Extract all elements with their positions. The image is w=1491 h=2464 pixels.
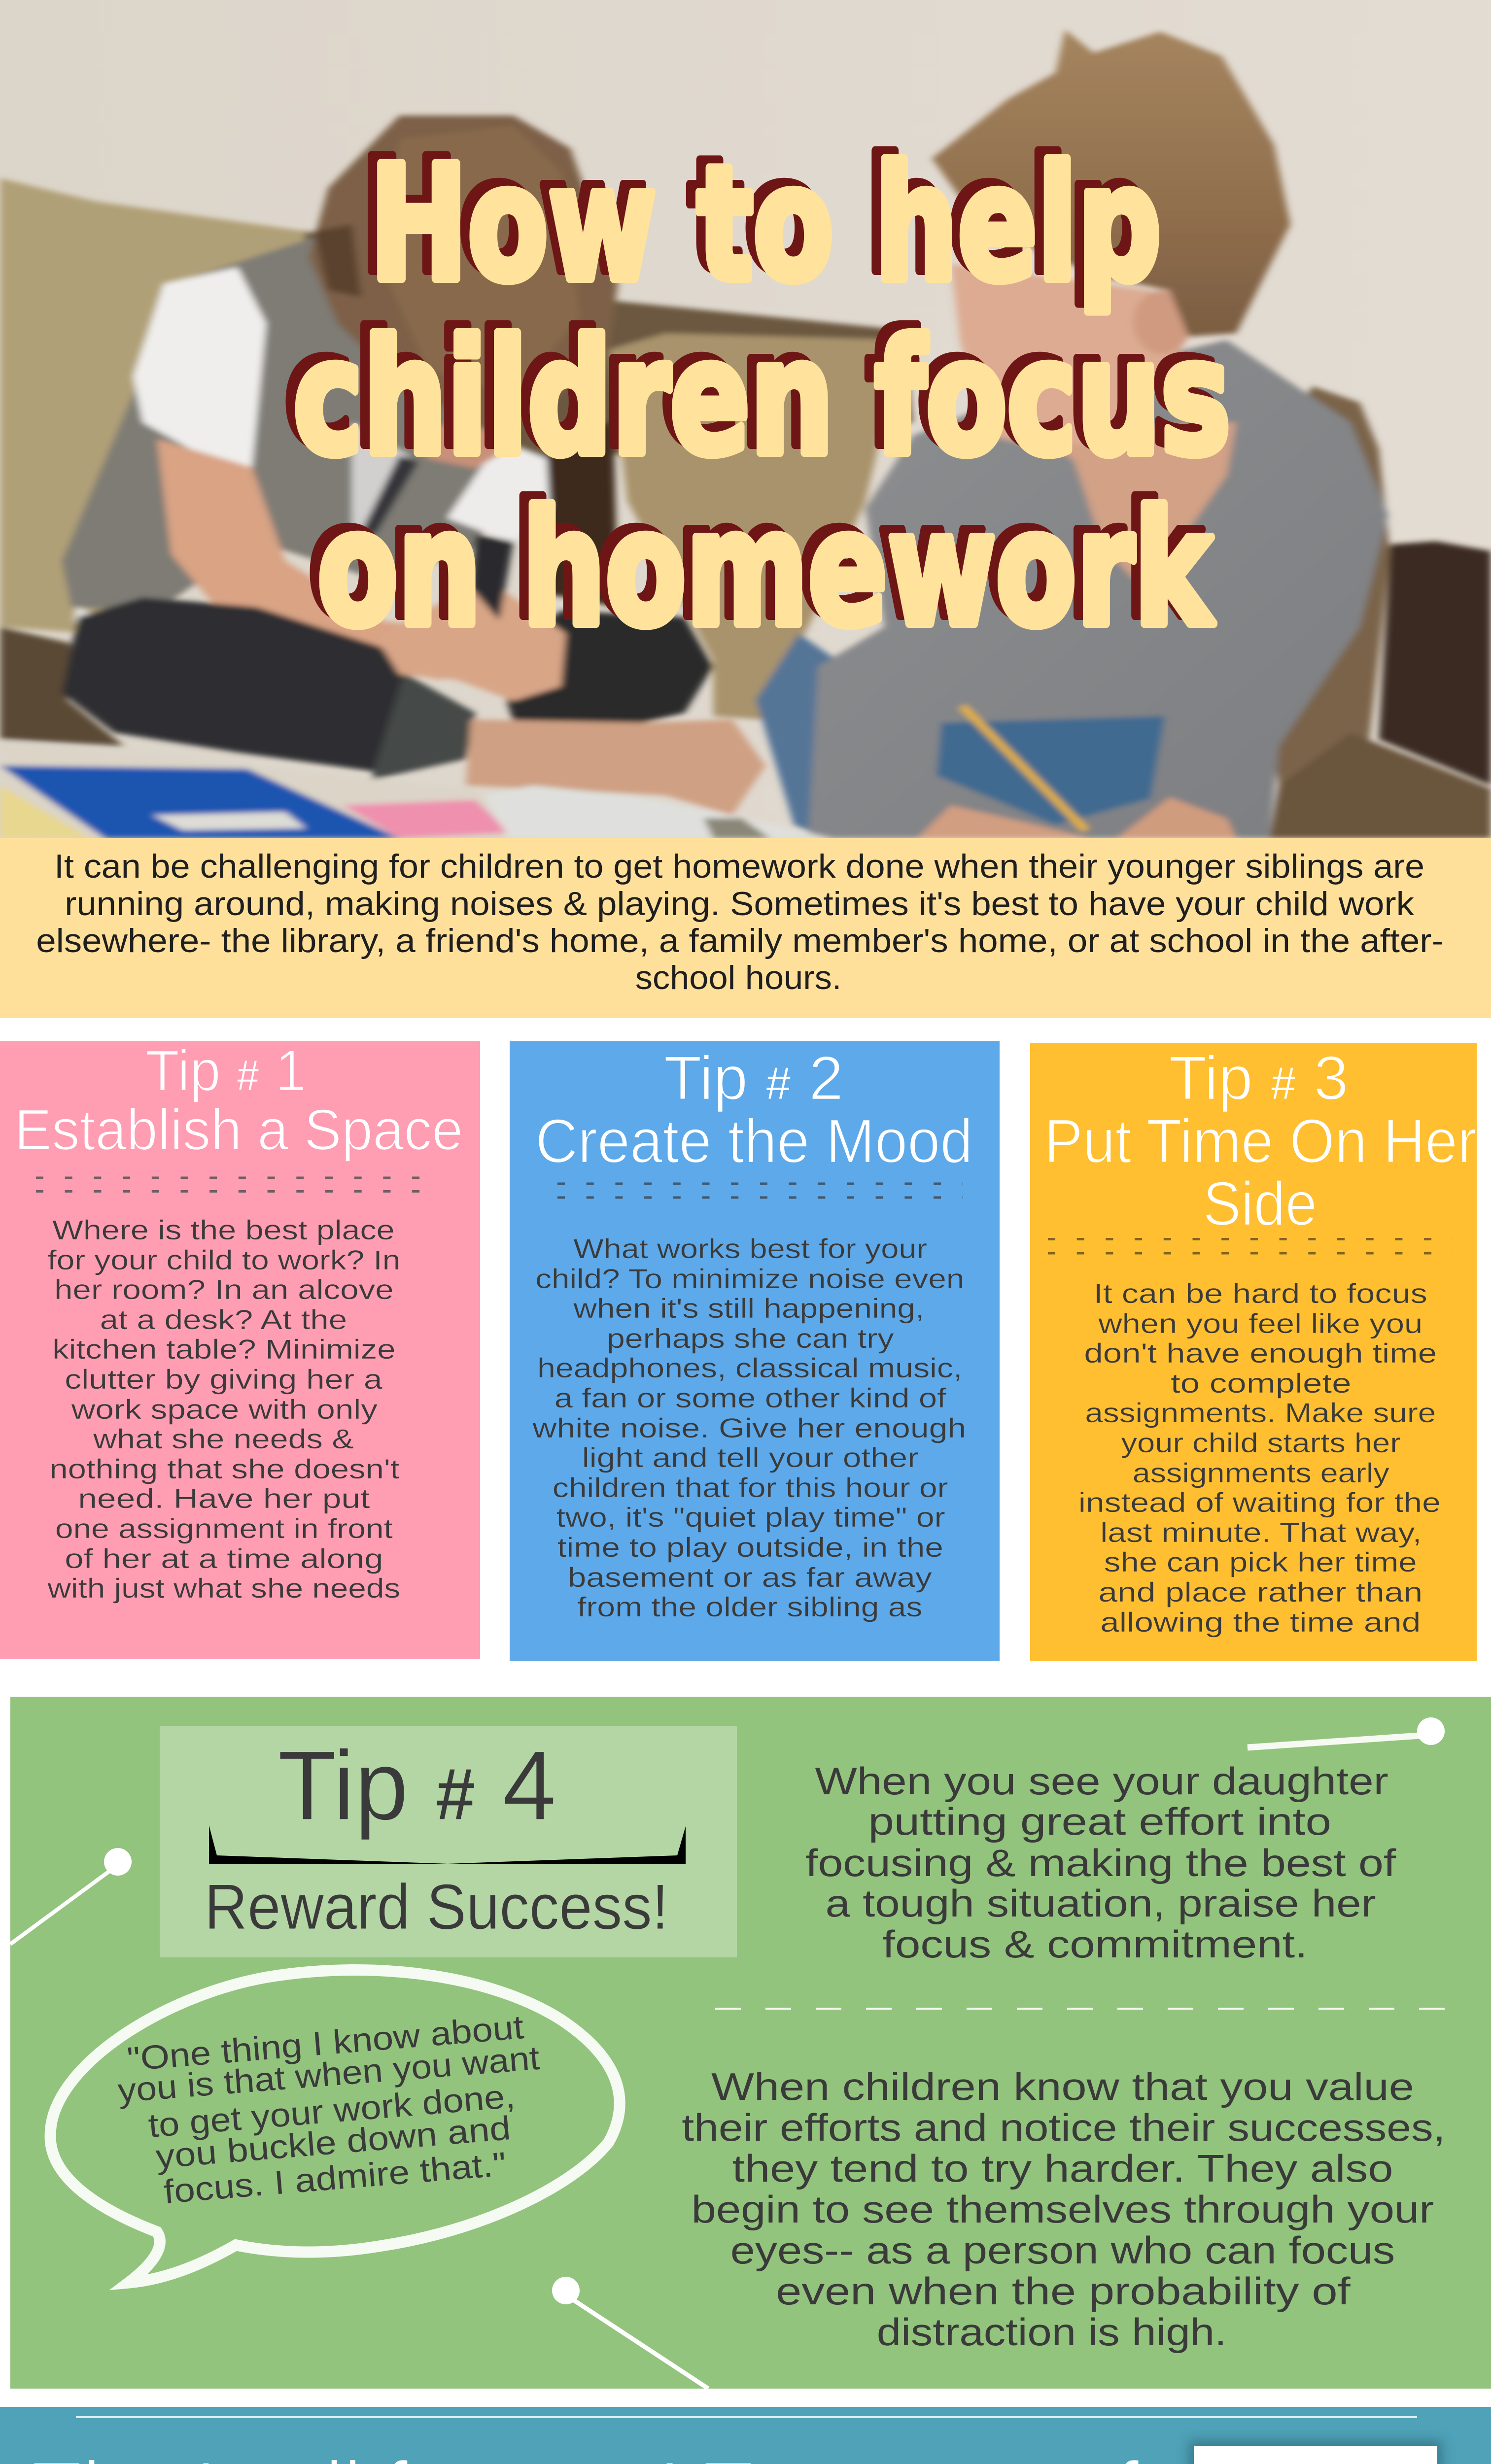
speech bubble bbox=[50, 1970, 620, 2283]
body text: two, it's "quiet play time" or bbox=[556, 1502, 945, 1533]
heading: tip 3: Tip # 3 bbox=[1169, 1044, 1349, 1113]
body text: clutter by giving her a bbox=[65, 1364, 382, 1395]
body text: at a desk? At the bbox=[100, 1304, 347, 1335]
heading: tip 1: Tip # 1 bbox=[145, 1038, 306, 1103]
speech bubble quote: "One thing I know about bbox=[126, 2008, 525, 2078]
heading: tip 3: Side bbox=[1203, 1169, 1317, 1238]
body text: perhaps she can try bbox=[607, 1323, 894, 1354]
portrait card: woman with book bbox=[1194, 2446, 1437, 2464]
body text: when it's still happening, bbox=[573, 1293, 924, 1324]
intro text: school hours. bbox=[635, 959, 841, 996]
pin: top right bbox=[1248, 1717, 1445, 1747]
hero photo: two boys on a sofa doing homework bbox=[0, 0, 1491, 838]
body text: kitchen table? Minimize bbox=[52, 1334, 396, 1365]
bracket bbox=[209, 1825, 686, 1864]
body text bbox=[47, 1215, 400, 1604]
intro band bbox=[0, 838, 1491, 1018]
heading box bbox=[160, 1726, 737, 1957]
body text: one assignment in front bbox=[55, 1513, 393, 1544]
panel: tip 4 reward success bbox=[10, 1697, 1491, 2389]
body text: a fan or some other kind of bbox=[555, 1383, 947, 1413]
panel: tip 2 bbox=[510, 1041, 1000, 1661]
body text: time to play outside, in the bbox=[557, 1532, 943, 1563]
heading: tip 4: Tip # 4 bbox=[277, 1731, 556, 1841]
body text: basement or as far away bbox=[568, 1562, 932, 1593]
speech bubble quote: you is that when you want bbox=[116, 2039, 541, 2110]
body text: for your child to work? In bbox=[47, 1245, 400, 1275]
body text: with just what she needs bbox=[47, 1573, 400, 1604]
body text: work space with only bbox=[71, 1394, 378, 1425]
title shadow bbox=[284, 125, 1221, 653]
dotted divider bbox=[557, 1184, 963, 1198]
body text bbox=[1078, 1278, 1441, 1638]
body text: of her at a time along bbox=[65, 1543, 383, 1574]
body text: Where is the best place bbox=[52, 1215, 395, 1245]
body text: nothing that she doesn't bbox=[49, 1454, 399, 1484]
body text: light and tell your other bbox=[582, 1442, 919, 1473]
heading: tip 2: Tip # 2 bbox=[664, 1044, 843, 1113]
text block: when children know: distraction is high. bbox=[877, 2311, 1227, 2354]
text block: praise bbox=[805, 1760, 1396, 1966]
text block: when children know bbox=[682, 2065, 1446, 2354]
body text: her room? In an alcove bbox=[54, 1274, 394, 1305]
panel: closing message bbox=[0, 2407, 1491, 2464]
speech bubble quote: you buckle down and bbox=[154, 2109, 512, 2176]
panel: tip 3 bbox=[1030, 1043, 1477, 1661]
speech bubble quote: to get your work done, bbox=[147, 2077, 517, 2145]
panel: tip 1: Establish a Space bbox=[14, 1097, 463, 1162]
dotted divider bbox=[36, 1178, 441, 1192]
heading: tip 3 bbox=[1044, 1044, 1477, 1238]
heading: tip 2 bbox=[535, 1044, 973, 1176]
title shadow: How to help bbox=[360, 125, 1152, 308]
title: How to help children focus on homework bbox=[284, 125, 1231, 661]
pin: left bbox=[10, 1848, 132, 1944]
speech bubble quote bbox=[116, 2008, 541, 2211]
panel: tip 2: Create the Mood bbox=[535, 1107, 973, 1176]
body text bbox=[532, 1233, 966, 1622]
body text: what she needs & bbox=[93, 1424, 354, 1454]
title face bbox=[293, 133, 1231, 661]
dotted divider bbox=[1048, 1239, 1453, 1253]
title face: on homework bbox=[317, 478, 1214, 661]
body text: need. Have her put bbox=[78, 1483, 370, 1514]
panel: tip 1 bbox=[0, 1038, 480, 1659]
heading box: Reward Success! bbox=[205, 1871, 668, 1943]
intro text bbox=[36, 848, 1444, 996]
body text: children that for this hour or bbox=[553, 1472, 948, 1503]
pin: bottom bbox=[552, 2277, 708, 2389]
title shadow: on homework bbox=[308, 470, 1205, 653]
body text: child? To minimize noise even bbox=[535, 1264, 964, 1294]
body text: headphones, classical music, bbox=[537, 1353, 962, 1383]
body text: white noise. Give her enough bbox=[532, 1413, 966, 1443]
body text: to complete bbox=[1171, 1368, 1352, 1399]
body text: from the older sibling as bbox=[577, 1592, 922, 1622]
speech bubble quote: focus. I admire that." bbox=[162, 2145, 508, 2211]
body text: What works best for your bbox=[573, 1233, 927, 1264]
heading: tip 1 bbox=[14, 1038, 463, 1162]
title face: How to help bbox=[370, 133, 1161, 316]
